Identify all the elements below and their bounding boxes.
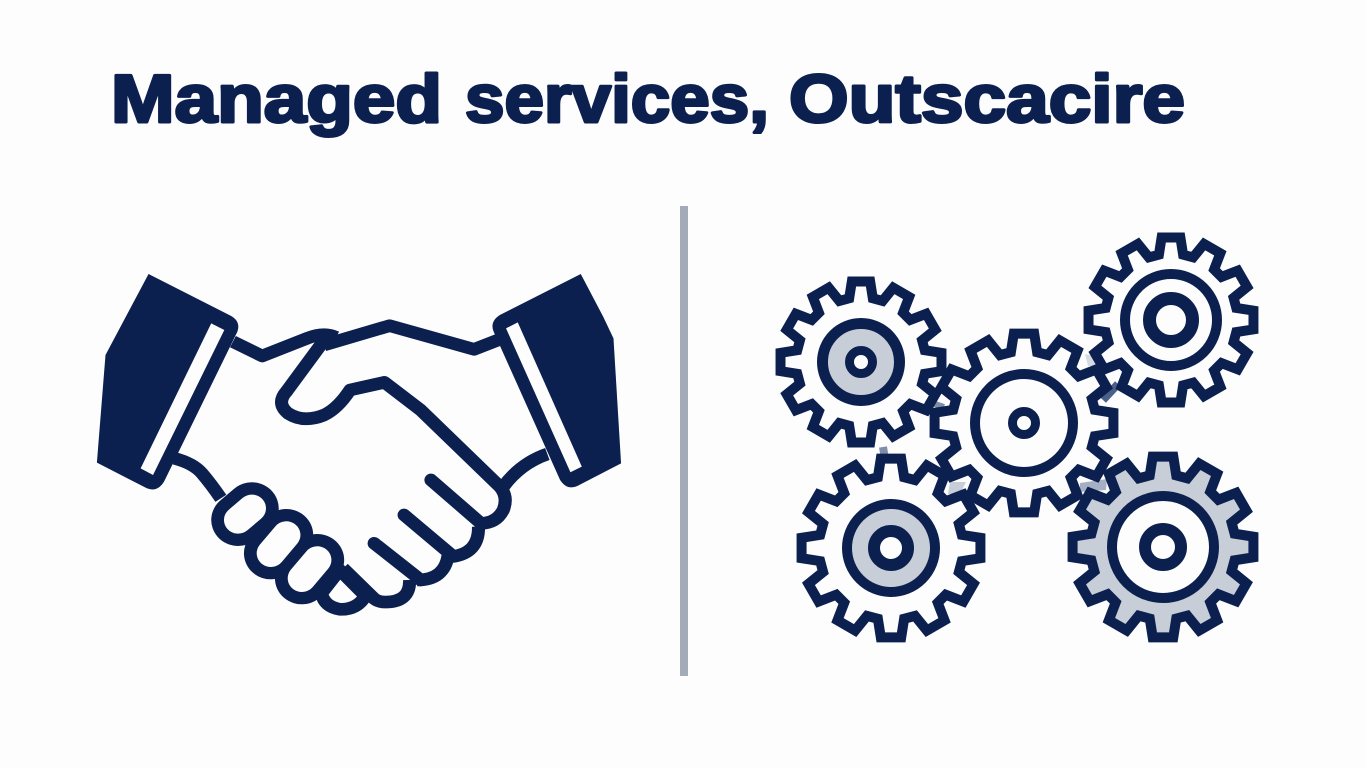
gear bottom left rings: [847, 504, 935, 592]
left hand knuckles: [238, 508, 317, 578]
divider: [680, 206, 688, 676]
icon: handshake: [97, 274, 621, 609]
gear bottom right rings: [1112, 496, 1214, 598]
gear fills: [781, 238, 1253, 637]
left cuff stripe: [141, 323, 224, 475]
gear top right rings: [1125, 274, 1217, 366]
right cuff: [492, 274, 621, 487]
icon: gears cluster: [781, 238, 1253, 637]
right cuff stripe: [506, 322, 582, 472]
title: services,: [465, 61, 769, 137]
gear top left rings: [822, 324, 900, 400]
gear outlines: [781, 238, 1253, 637]
left cuff: [97, 274, 238, 490]
title: Outscacire: [789, 61, 1185, 137]
gear centre rings: [975, 374, 1073, 472]
gear connector fragments: [883, 354, 1118, 494]
hand outlines: [174, 326, 547, 609]
title: [111, 61, 1185, 137]
title: Managed: [111, 61, 442, 137]
